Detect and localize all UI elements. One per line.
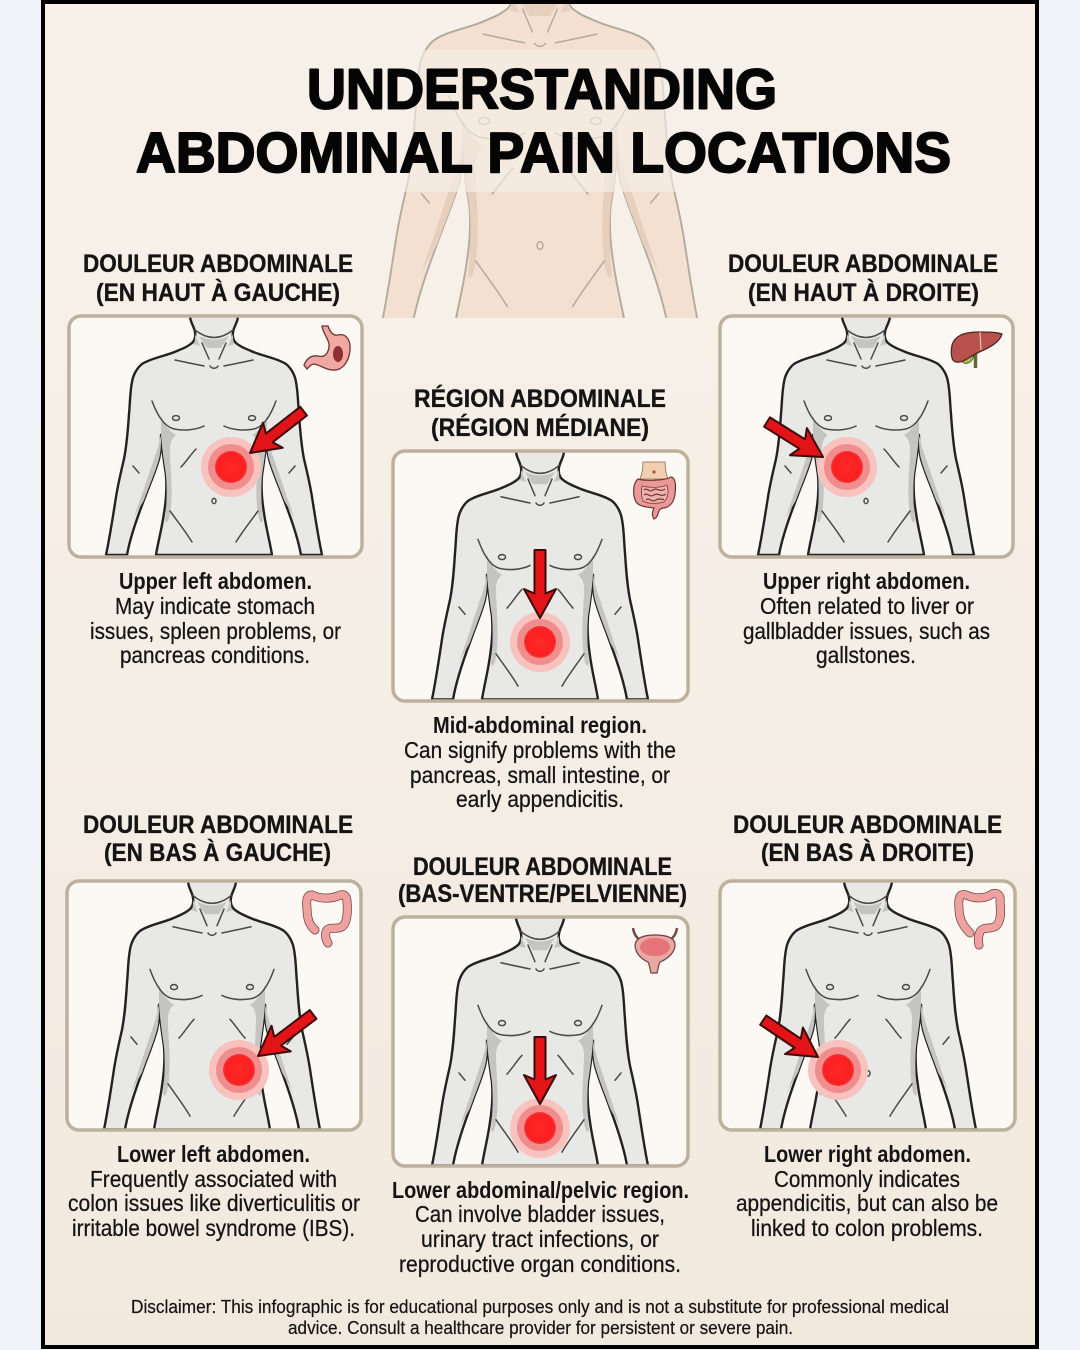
heading: upper left [83,250,353,307]
description: upper left: Upper left abdomen. [119,568,312,594]
description: upper right: Upper right abdomen. [763,568,970,594]
disclaimer: Disclaimer: This infographic is for educational purposes only and is not a substitute for professional medical [131,1297,949,1317]
description: lower left [68,1141,360,1241]
description: upper left [90,568,341,668]
body figure [760,881,976,1130]
title [136,58,951,184]
panel: mid abdomen [393,451,688,701]
description: lower right: linked to colon problems. [751,1215,983,1241]
description: upper right [743,568,990,668]
heading: lower left: DOULEUR ABDOMINALE [83,811,353,839]
description: lower right [736,1141,998,1241]
arrow [759,408,831,471]
arrow [240,399,313,466]
panel: upper left [69,316,362,557]
section: lower right [720,811,1015,1241]
heading: upper right: DOULEUR ABDOMINALE [728,250,998,278]
heading: lower left [83,811,353,867]
arrow [524,1037,556,1104]
heading: upper left: (EN HAUT À GAUCHE) [96,278,340,307]
description: lower left: Lower left abdomen. [117,1141,310,1167]
description: lower left: irritable bowel syndrome (IBS). [72,1215,355,1241]
section: mid abdomen [393,384,688,812]
pain marker [209,1040,269,1100]
section: upper right [720,250,1013,668]
section: upper left [69,250,362,668]
panel: upper right [720,316,1013,557]
icon: intestines [634,462,676,519]
heading: lower right: (EN BAS À DROITE) [761,838,974,867]
arrow [524,550,556,618]
description: mid abdomen: Mid-abdominal region. [433,712,647,738]
disclaimer [131,1297,949,1338]
description: lower right: appendicitis, but can also be [736,1190,998,1216]
icon: liver [951,332,1002,368]
heading: lower centre: (BAS-VENTRE/PELVIENNE) [398,880,687,908]
heading: lower centre [398,853,687,908]
title band [115,50,975,192]
pain marker [510,1098,570,1158]
body figure [104,881,320,1130]
heading: mid abdomen: (RÉGION MÉDIANE) [431,413,649,442]
description: upper left: pancreas conditions. [120,642,310,668]
body figure [432,451,648,700]
description: upper left: May indicate stomach [115,593,315,619]
panel: lower centre [393,917,688,1166]
arrow [754,1007,827,1070]
disclaimer: advice. Consult a healthcare provider for persistent or severe pain. [288,1318,793,1338]
icon: stomach [304,326,350,370]
description: mid abdomen: pancreas, small intestine, or [410,762,670,788]
description: mid abdomen [404,712,676,812]
title: ABDOMINAL PAIN LOCATIONS [136,121,951,184]
section: lower left [67,811,361,1241]
heading: lower left: (EN BAS À GAUCHE) [104,838,331,867]
pain marker [201,437,261,497]
description: lower centre: Lower abdominal/pelvic region. [392,1177,689,1203]
description: lower left: colon issues like diverticulitis or [68,1190,360,1216]
description: upper right: gallbladder issues, such as [743,618,990,644]
description: lower centre: urinary tract infections, or [421,1226,659,1252]
heading: upper right: (EN HAUT À DROITE) [748,278,979,307]
body figure [758,316,974,555]
panel: lower right [720,881,1015,1130]
pain marker [510,612,570,672]
description: upper right: gallstones. [816,642,916,668]
section: lower centre [392,853,689,1277]
panel: lower left [67,881,361,1130]
description: lower right: Commonly indicates [774,1166,960,1192]
description: lower left: Frequently associated with [90,1166,337,1192]
faded background torso [381,0,699,326]
description: lower centre: reproductive organ conditions. [399,1251,681,1277]
arrow [248,1002,323,1069]
icon: bladder [633,928,677,973]
body figure [106,316,322,555]
description: lower right: Lower right abdomen. [764,1141,971,1167]
description: mid abdomen: early appendicitis. [456,786,624,812]
heading: upper right [728,250,998,307]
description: upper right: Often related to liver or [760,593,974,619]
heading: lower right: DOULEUR ABDOMINALE [733,811,1002,839]
body figure [432,917,648,1166]
icon: colon [307,895,347,943]
pain marker [808,1040,868,1100]
heading: mid abdomen: RÉGION ABDOMINALE [414,384,666,413]
title: UNDERSTANDING [307,58,777,120]
description: lower centre: Can involve bladder issues, [415,1201,665,1227]
description: lower centre [392,1177,689,1277]
pain marker [817,437,877,497]
heading: lower right [733,811,1002,867]
heading: mid abdomen [414,384,666,442]
heading: lower centre: DOULEUR ABDOMINALE [413,853,672,881]
description: mid abdomen: Can signify problems with the [404,737,676,763]
heading: upper left: DOULEUR ABDOMINALE [83,250,353,278]
icon: colon [959,893,1001,945]
description: upper left: issues, spleen problems, or [90,618,341,644]
